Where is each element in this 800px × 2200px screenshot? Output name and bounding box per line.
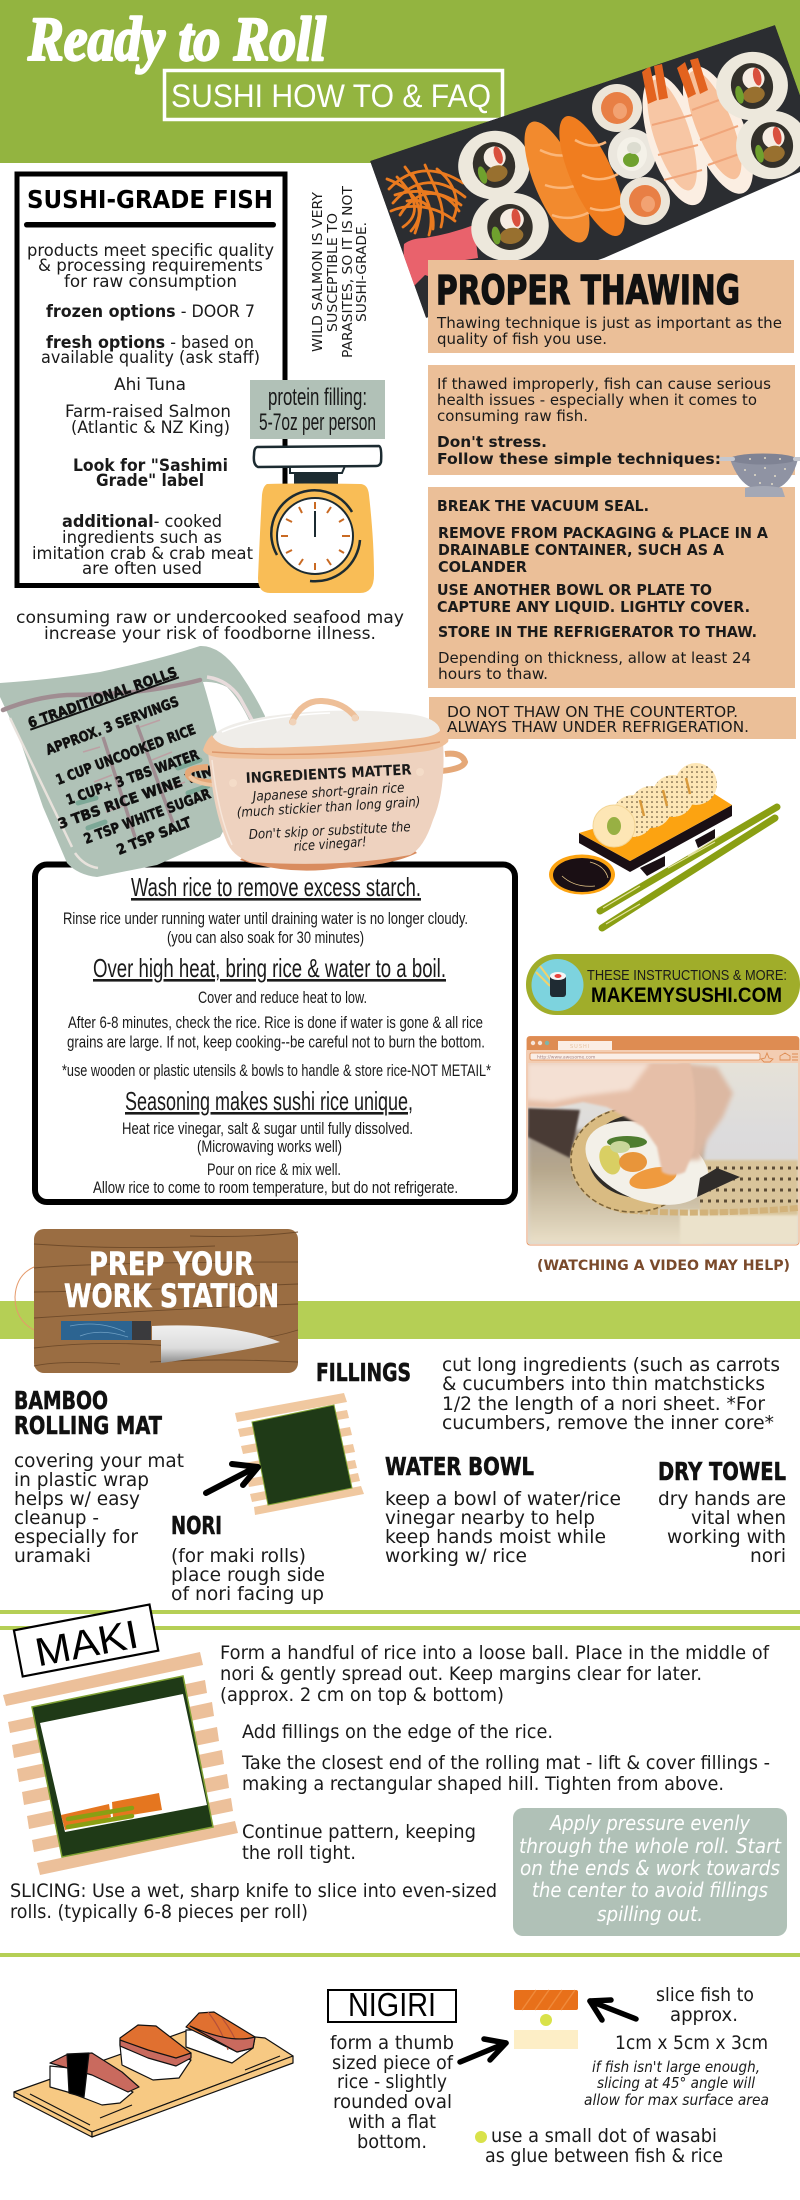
wood sign: prep your work station [34,1229,298,1373]
illustration: maki on mat [3,1652,238,1875]
text: nigiri rice: bottom. [357,2131,427,2153]
text: recipe: APPROX. 3 SERVINGS [44,694,181,759]
text: ingredients matter: (much stickier than long grain) [236,794,421,821]
browser window with rolling photo [527,1036,799,1245]
text: rinse: Rinse rice under running water until draining water is no longer cloudy. [63,909,468,928]
callout: protein filling [250,380,385,439]
text: slice fish [615,1984,768,2054]
icon: sushi circle [532,959,584,1011]
text: rinse: (you can also soak for 30 minutes) [167,928,364,947]
text: nori: (for maki rolls) [171,1545,306,1567]
text: ingredients matter [236,762,421,855]
text: fish description: frozen options - DOOR 7 [46,302,255,321]
photo: hands rolling sushi [527,1063,798,1244]
text: seasoning [93,1119,458,1197]
text: bamboo mat: uramaki [14,1545,91,1567]
text: thawing intro: Thawing technique is just as important as the [436,314,782,332]
callout: do not thaw on countertop: ALWAYS THAW UNDER REFRIGERATION. [447,718,749,736]
callout: apply pressure: spilling out. [597,1902,703,1926]
text: recipe: 1 CUP+ 3 TBS WATER [64,747,202,809]
text: rinse [63,909,468,947]
text: seafood warning [16,608,404,644]
banner: make my sushi [526,954,800,1015]
panel: sushi-grade fish [17,174,285,586]
text: fillings: cut long ingredients (such as carrots [442,1354,780,1376]
text: maki steps: nori & gently spread out. Keep margins clear for later. [220,1663,702,1685]
panel: proper thawing [428,260,794,353]
text: maki steps: making a rectangular shaped hill. Tighten from above. [242,1773,724,1795]
text: seasoning: Heat rice vinegar, salt & sugar until fully dissolved. [122,1119,413,1138]
callout: apply pressure: the center to avoid fillings [532,1878,768,1902]
text: slicing note: slicing at 45° angle will [597,2074,756,2092]
heading: bamboo rolling mat: BAMBOO [14,1386,108,1415]
photo: sushi platter on slate [370,25,800,318]
text: seafood warning: increase your risk of foodborne illness. [44,624,376,644]
text: nigiri rice: rounded oval [333,2091,452,2113]
heading: nori: NORI [171,1511,222,1540]
text: nigiri rice [330,2032,454,2153]
text: seasoning: Pour on rice & mix well. [207,1160,341,1179]
panel: rice instructions [35,864,515,1202]
text: fish description: ingredients such as [62,528,222,547]
text: dry towel: vital when [691,1507,786,1529]
text: fish description: for raw consumption [64,272,237,291]
text: thawing intro: quality of fish you use. [437,330,607,348]
text: fish description [27,241,274,578]
heading: sushi-grade fish: SUSHI-GRADE FISH [27,185,273,214]
divider bar [24,222,276,228]
text: water bowl: keep a bowl of water/rice [385,1488,621,1510]
text: fish description: Grade" label [96,471,204,490]
text: slice fish: approx. [670,2004,738,2026]
callout: do not thaw on countertop: DO NOT THAW ON THE COUNTERTOP. [447,703,738,721]
illustration: cooking pot [188,701,465,871]
text: bamboo mat: cleanup - [14,1507,99,1529]
text: fish description: available quality (ask staff) [41,348,260,367]
icon: knife [61,1321,280,1363]
text: fish description: additional- cooked [62,512,222,531]
text: water bowl: working w/ rice [385,1545,527,1567]
icon: colander [721,454,800,497]
text: dry towel: dry hands are [658,1488,786,1510]
text: recipe: 2 TSP SALT [115,814,194,859]
text: nigiri rice: rice - slightly [337,2071,447,2093]
illustration: nigiri on board [14,2012,293,2137]
text: ingredients matter: rice vinegar! [293,834,367,855]
callout: apply pressure: Apply pressure evenly [548,1811,751,1835]
diagram: fish, wasabi, rice [514,1990,578,2049]
text: fillings: & cucumbers into thin matchsticks [442,1373,765,1395]
heading: water bowl: WATER BOWL [385,1452,534,1481]
text: maki steps: (approx. 2 cm on top & bottom) [220,1684,504,1706]
text: nori: place rough side [171,1564,325,1586]
title: Ready to Roll [27,6,327,74]
panel: thawing warning [428,365,795,475]
callout: do not thaw on countertop [429,697,796,739]
text: maki steps: rolls. (typically 6-8 pieces per roll) [10,1901,308,1923]
text: maki steps [10,1642,770,1923]
text: wasabi note: as glue between fish & rice [485,2145,723,2167]
panel: thawing steps: REMOVE FROM PACKAGING & PLACE IN A [438,524,768,542]
callout: apply pressure [513,1808,787,1936]
banner: make my sushi: MAKEMYSUSHI.COM [591,984,782,1007]
text: dry towel: nori [750,1545,786,1567]
heading: boil: Over high heat, bring rice & water to a boil. [93,953,446,983]
illustration: measuring cup with recipe [0,646,265,877]
text: fillings [442,1354,780,1434]
heading: seasoning: Seasoning makes sushi rice unique, [125,1086,413,1116]
text: maki steps: Continue pattern, keeping [242,1821,476,1843]
text: seasoning: Allow rice to come to room temperature, but do not refrigerate. [93,1178,458,1197]
browser window with rolling photo: SUSHI [570,1044,590,1050]
text: maki steps: Form a handful of rice into a loose ball. Place in the middle of [220,1642,770,1664]
label: maki [14,1604,159,1678]
text: recipe: 2 TSP WHITE SUGAR [82,786,213,848]
heading: prep your work station [64,1245,279,1315]
text: fish description: Farm-raised Salmon [65,402,231,421]
heading: fillings: FILLINGS [316,1358,411,1387]
arrow: to nori [206,1464,258,1493]
section rules [0,1610,800,1957]
text: thawing intro [436,314,782,348]
panel: thawing steps: BREAK THE VACUUM SEAL. [437,497,649,515]
arrow: to rice [460,2039,506,2062]
text: water bowl: vinegar nearby to help [385,1507,595,1529]
text: cook [62,988,491,1080]
text: cook: After 6-8 minutes, check the rice. Rice is done if water is gone & all rice [68,1013,483,1032]
heading: bamboo rolling mat: ROLLING MAT [14,1411,162,1440]
section band: work station [0,1301,800,1339]
callout: protein filling: 5-7oz per person [259,409,376,436]
text: nigiri rice: sized piece of [332,2052,454,2074]
text: cook: *use wooden or plastic utensils & bowls to handle & store rice-NOT METAIL* [62,1061,491,1080]
panel: thawing steps: hours to thaw. [438,665,548,683]
text: fish description: & processing requirements [38,256,263,275]
text: maki steps: SLICING: Use a wet, sharp knife to slice into even-sized [10,1880,497,1902]
label: nigiri: NIGIRI [348,1986,436,2023]
text: fish description: imitation crab & crab meat [32,544,254,563]
rotated note: wild salmon: PARASITES, SO IT IS NOT [340,185,356,358]
text: fish description: fresh options - based on [46,333,254,352]
text: nori [171,1545,325,1605]
text: dry towel [658,1488,786,1567]
text: fillings: 1/2 the length of a nori sheet. *For [442,1393,765,1415]
text: cook: Cover and reduce heat to low. [198,988,367,1007]
text: recipe [26,665,255,859]
text: wasabi note: use a small dot of wasabi [491,2125,717,2147]
panel: thawing steps: CAPTURE ANY LIQUID. LIGHTLY COVER. [437,598,750,616]
browser window with rolling photo: http://www.awesome.com [537,1054,595,1060]
text: bamboo mat: helps w/ easy [14,1488,140,1510]
text: seafood warning: consuming raw or undercooked seafood may [16,608,404,628]
rotated note: wild salmon: WILD SALMON IS VERY [310,191,326,352]
text: maki steps: Add fillings on the edge of the rice. [242,1721,553,1743]
text: nigiri rice: form a thumb [330,2032,454,2054]
arrow: to fish [590,2000,636,2020]
text: cook: grains are large. If not, keep cooking--be careful not to burn the bottom. [67,1032,485,1052]
callout: apply pressure: on the ends & work towards [520,1856,780,1880]
text: fish description: are often used [82,559,202,578]
panel: thawing steps: USE ANOTHER BOWL OR PLATE TO [437,581,712,599]
panel: thawing steps: Depending on thickness, allow at least 24 [438,649,751,667]
illustration: nori on mat [235,1393,364,1515]
label: maki: MAKI [32,1613,142,1675]
text: recipe: 1 CUP UNCOOKED RICE [54,722,198,789]
text: maki steps: Take the closest end of the rolling mat - lift & cover fillings - [241,1752,770,1774]
text: fillings: cucumbers, remove the inner core* [442,1412,774,1434]
callout: apply pressure: through the whole roll. Start [519,1834,782,1858]
heading: prep your work station: WORK STATION [64,1277,279,1315]
heading: wash rice: Wash rice to remove excess starch. [131,872,421,902]
panel: thawing steps: COLANDER [438,558,527,576]
text: dry towel: working with [667,1526,786,1548]
text: fish description: products meet specific quality [27,241,274,260]
panel: thawing steps: STORE IN THE REFRIGERATOR TO THAW. [438,623,757,641]
fillings [61,1793,162,1830]
rotated note: wild salmon [310,185,370,358]
text: bamboo mat [14,1450,184,1567]
panel: thawing warning: If thawed improperly, fish can cause serious [437,375,771,393]
text: slice fish: 1cm x 5cm x 3cm [615,2032,768,2054]
text: recipe: 6 TRADITIONAL ROLLS [26,665,179,732]
text: water bowl [385,1488,621,1567]
panel: thawing warning: health issues - especially when it comes to [437,391,757,409]
text: bamboo mat: in plastic wrap [14,1469,149,1491]
heading: prep your work station: PREP YOUR [89,1245,254,1283]
text: slice fish: slice fish to [656,1984,754,2006]
sign handle outline [15,1267,34,1330]
text: wasabi note [475,2125,723,2167]
illustration: sushi set with chopsticks [549,763,777,928]
subtitle box: SUSHI HOW TO & FAQ [171,78,491,114]
text: slicing note [584,2058,769,2109]
text: fish description: Look for "Sashimi [73,456,228,475]
text: slicing note: if fish isn't large enough, [592,2058,760,2076]
text: ingredients matter: INGREDIENTS MATTER [245,762,412,787]
text: seasoning: (Microwaving works well) [197,1137,342,1156]
text: bamboo mat: covering your mat [14,1450,184,1472]
panel: thawing warning: Don't stress. [437,433,547,451]
callout: protein filling: protein filling: [268,384,367,411]
rotated note: wild salmon: SUSCEPTIBLE TO [325,213,341,332]
text: ingredients matter: Don't skip or substitute the [248,819,411,843]
text: fish description: Ahi Tuna [114,375,186,394]
text: ingredients matter: Japanese short-grain rice [250,780,405,805]
text: water bowl: keep hands moist while [385,1526,606,1548]
header band [0,0,800,163]
text: maki steps: the roll tight. [242,1842,356,1864]
caption: watching a video: (WATCHING A VIDEO MAY HELP) [537,1258,790,1274]
text: slicing note: allow for max surface area [584,2091,769,2109]
heading: bamboo rolling mat [14,1386,162,1440]
text: bamboo mat: especially for [14,1526,138,1548]
panel: thawing steps: DRAINABLE CONTAINER, SUCH AS A [438,541,724,559]
text: nigiri rice: with a flat [348,2111,436,2133]
text: fish description: (Atlantic & NZ King) [71,418,230,437]
rotated note: wild salmon: SUSHI-GRADE. [354,222,370,322]
panel: thawing warning: Follow these simple techniques: [437,450,721,468]
panel: thawing steps [428,487,795,688]
text: recipe: 3 TBS RICE WINE VINEGAR [56,750,255,833]
icon: kitchen scale [254,446,381,593]
text: nori: of nori facing up [171,1583,324,1605]
panel: thawing warning: consuming raw fish. [437,407,588,425]
